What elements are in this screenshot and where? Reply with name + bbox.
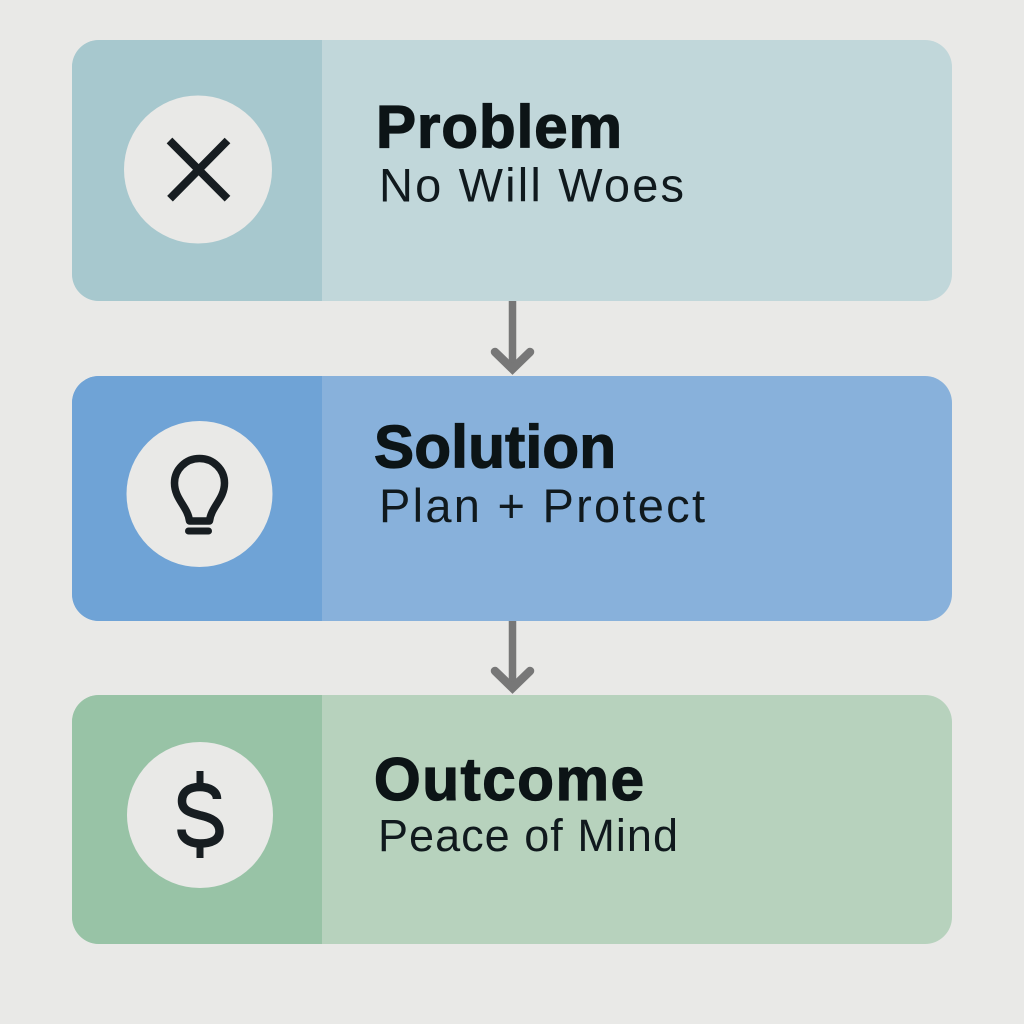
- text: plan + protect: Plan + Protect: [379, 479, 705, 532]
- arrow: problem to solution: [495, 301, 530, 369]
- heading: outcome: Outcome: [374, 746, 644, 813]
- icon: light bulb: [126, 421, 272, 567]
- icon: x mark: [124, 96, 272, 244]
- panel: outcome: [72, 695, 952, 944]
- arrow: solution to outcome: [495, 621, 530, 688]
- icon: dollar sign: [127, 742, 273, 888]
- text: peace of mind: Peace of Mind: [378, 810, 678, 861]
- heading: solution: Solution: [374, 414, 616, 480]
- panel: solution: [72, 376, 952, 621]
- panel: problem: [72, 40, 952, 301]
- text: no will woes: No Will Woes: [379, 158, 684, 212]
- flow diagram: [72, 40, 952, 944]
- heading: problem: Problem: [376, 94, 622, 160]
